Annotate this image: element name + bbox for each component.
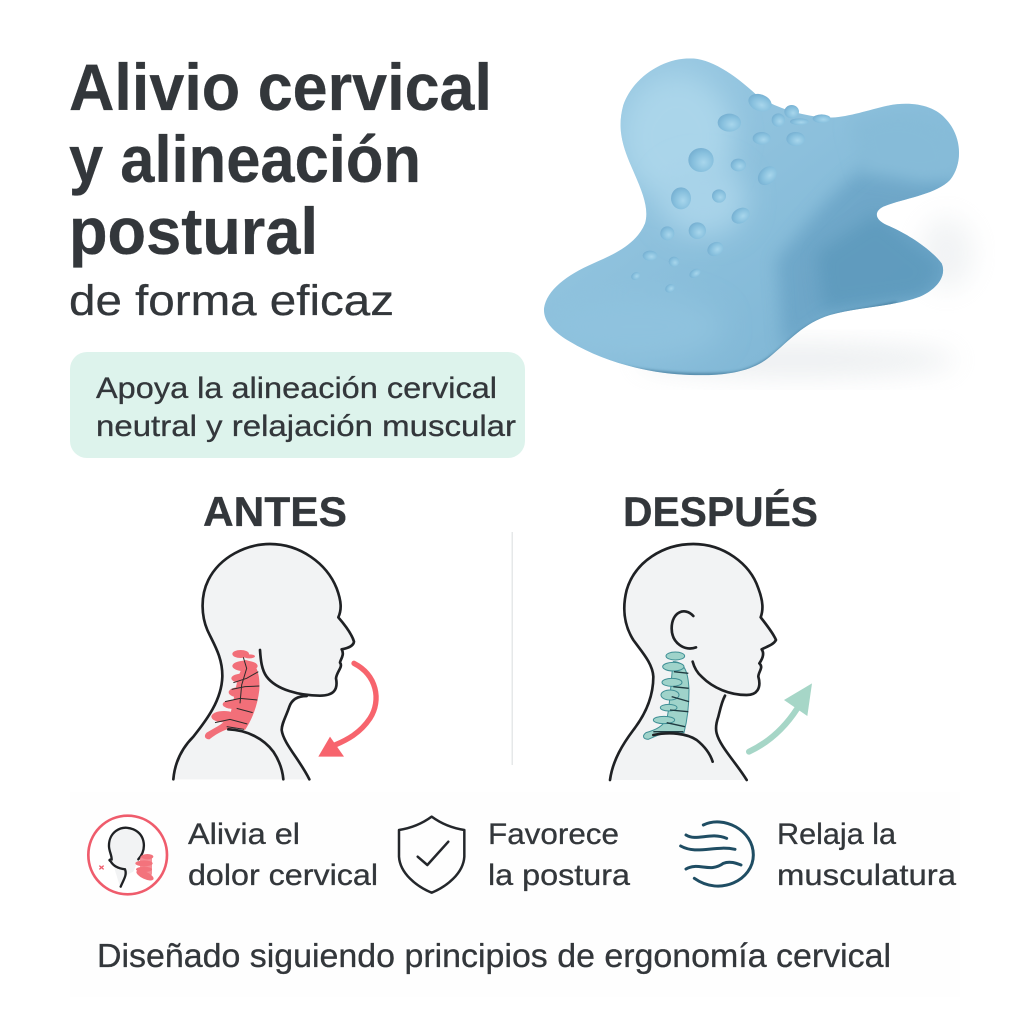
arrow: upward alignment [749,683,812,752]
title block: postural [69,194,318,268]
icon: circle with waves [681,822,753,886]
callout: benefit summary: neutral y relajación muscular [96,410,516,443]
benefit: relaja la musculatura [681,818,956,892]
illustration: after posture [610,544,812,780]
heading: después: DESPUÉS [623,488,818,535]
benefit: favorece la postura: Favorece [488,818,619,851]
benefit: alivia el dolor cervical: dolor cervical [188,859,378,892]
icon: head with neck pain [88,816,167,894]
callout: benefit summary [70,352,525,458]
benefit: alivia el dolor cervical: Alivia el [188,818,300,851]
benefit: favorece la postura [399,817,630,893]
benefit: relaja la musculatura: musculatura [777,859,956,892]
benefit: favorece la postura: la postura [488,859,630,892]
title block [69,50,492,325]
product image: cervical pillow [530,40,980,390]
infographic canvas [69,58,968,974]
callout: benefit summary: Apoya la alineación cervical [96,372,497,405]
icon: shield with check [399,817,464,893]
benefit: relaja la musculatura: Relaja la [777,818,896,851]
illustration: before posture [173,544,376,779]
heading: antes: ANTES [203,488,347,535]
spine: inflamed [205,650,259,739]
title block: y alineación [69,122,421,196]
head and neck outline with ear [610,544,776,780]
head and neck outline [173,544,354,779]
massage bumps [630,91,831,294]
arrow: downward tilt [318,663,376,757]
title block: Alivio cervical [69,50,492,124]
footer statement: Diseñado siguiendo principios de ergonomía cervical [97,937,891,974]
spine: aligned [644,652,689,739]
benefit: alivia el dolor cervical [88,816,378,894]
title block: de forma eficaz [69,277,394,325]
benefits row background [70,792,960,997]
